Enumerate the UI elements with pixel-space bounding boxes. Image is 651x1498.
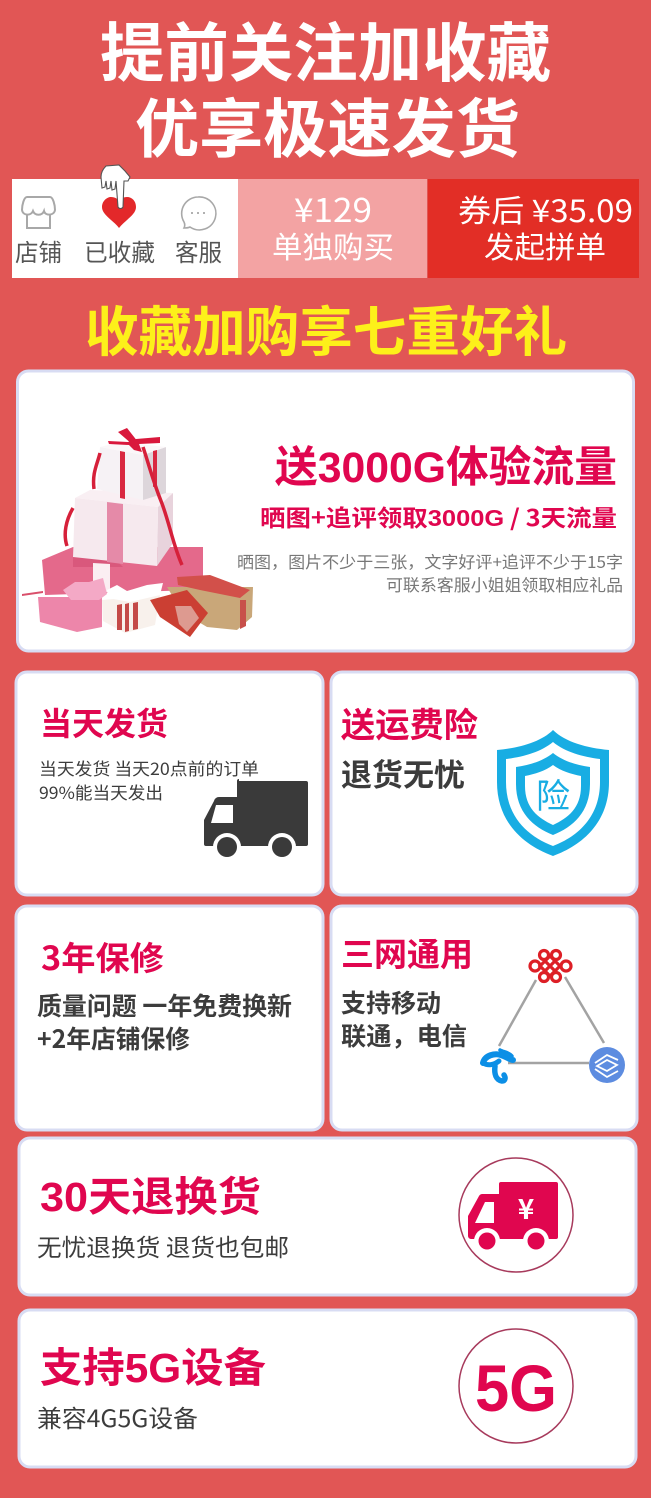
network triangle diagram (483, 950, 625, 1083)
description (37, 987, 292, 1056)
panel: same-day shipping (16, 672, 323, 895)
description: 联通，电信 (341, 1017, 467, 1053)
coupon price: 券后 ¥35.09 (458, 186, 633, 231)
traffic note (237, 549, 623, 596)
icon: shield (497, 730, 609, 856)
description: 退货无忧 (341, 750, 465, 795)
icon: chat bubble (182, 197, 216, 230)
heading: 支持5G设备 (40, 1334, 266, 1394)
icon: 5G badge: 5G (475, 1351, 557, 1425)
description: 质量问题 一年免费换新 (37, 987, 292, 1023)
description: 99%能当天发出 (39, 779, 163, 804)
panel: 3-year warranty (16, 906, 323, 1130)
description: 兼容4G5G设备 (37, 1399, 198, 1434)
traffic heading: 送3000G体验流量 (275, 433, 617, 495)
heading: 当天发货 (40, 699, 168, 745)
icon: unicom knot (530, 950, 571, 982)
title (100, 3, 551, 171)
service label: 客服 (175, 233, 222, 268)
description: 当天发货 当天20点前的订单 (39, 755, 259, 780)
price solo: ¥129 (294, 184, 372, 232)
icon: truck (204, 779, 308, 861)
panel: 5G support (19, 1310, 636, 1467)
action bar (12, 165, 639, 278)
group buy label: 发起拼单 (484, 223, 606, 267)
description (341, 984, 467, 1053)
title: 提前关注加收藏 (100, 3, 551, 95)
description: +2年店铺保修 (37, 1020, 190, 1056)
icon: return truck (459, 1158, 573, 1272)
favorited label: 已收藏 (84, 233, 155, 268)
icon: store (22, 197, 55, 228)
icon: 5G badge (459, 1329, 573, 1443)
icon: return truck: ¥ (518, 1188, 535, 1228)
icon: pointing hand (101, 165, 130, 208)
solo buy label: 单独购买 (272, 223, 394, 267)
title: 优享极速发货 (135, 79, 520, 171)
heading: 三网通用 (341, 928, 473, 976)
traffic subheading: 晒图+追评领取 3000G / 3天流量 (260, 499, 617, 533)
description: 支持移动 (341, 984, 441, 1020)
icon: telecom (483, 1050, 513, 1081)
heading: 3年保修 (41, 932, 164, 980)
heading: 30天退换货 (40, 1163, 261, 1223)
description (39, 755, 259, 804)
icon: shield: 险 (536, 769, 570, 818)
icon: mobile (589, 1047, 625, 1083)
panel: all networks (331, 906, 637, 1130)
panel: 30-day returns (19, 1138, 636, 1295)
description: 无忧退换货 退货也包邮 (37, 1228, 289, 1263)
store label: 店铺 (15, 233, 62, 268)
traffic note: 晒图，图片不少于三张，文字好评+追评不少于15字 (237, 549, 623, 573)
heading: 送运费险 (341, 698, 478, 747)
heading: seven gifts: 收藏加购享七重好礼 (85, 288, 567, 367)
panel: 3000G traffic (18, 371, 634, 651)
panel: shipping insurance (331, 672, 637, 895)
gift boxes illustration (22, 428, 253, 637)
traffic note: 可联系客服小姐姐领取相应礼品 (386, 572, 623, 596)
icon: red heart (102, 197, 136, 228)
